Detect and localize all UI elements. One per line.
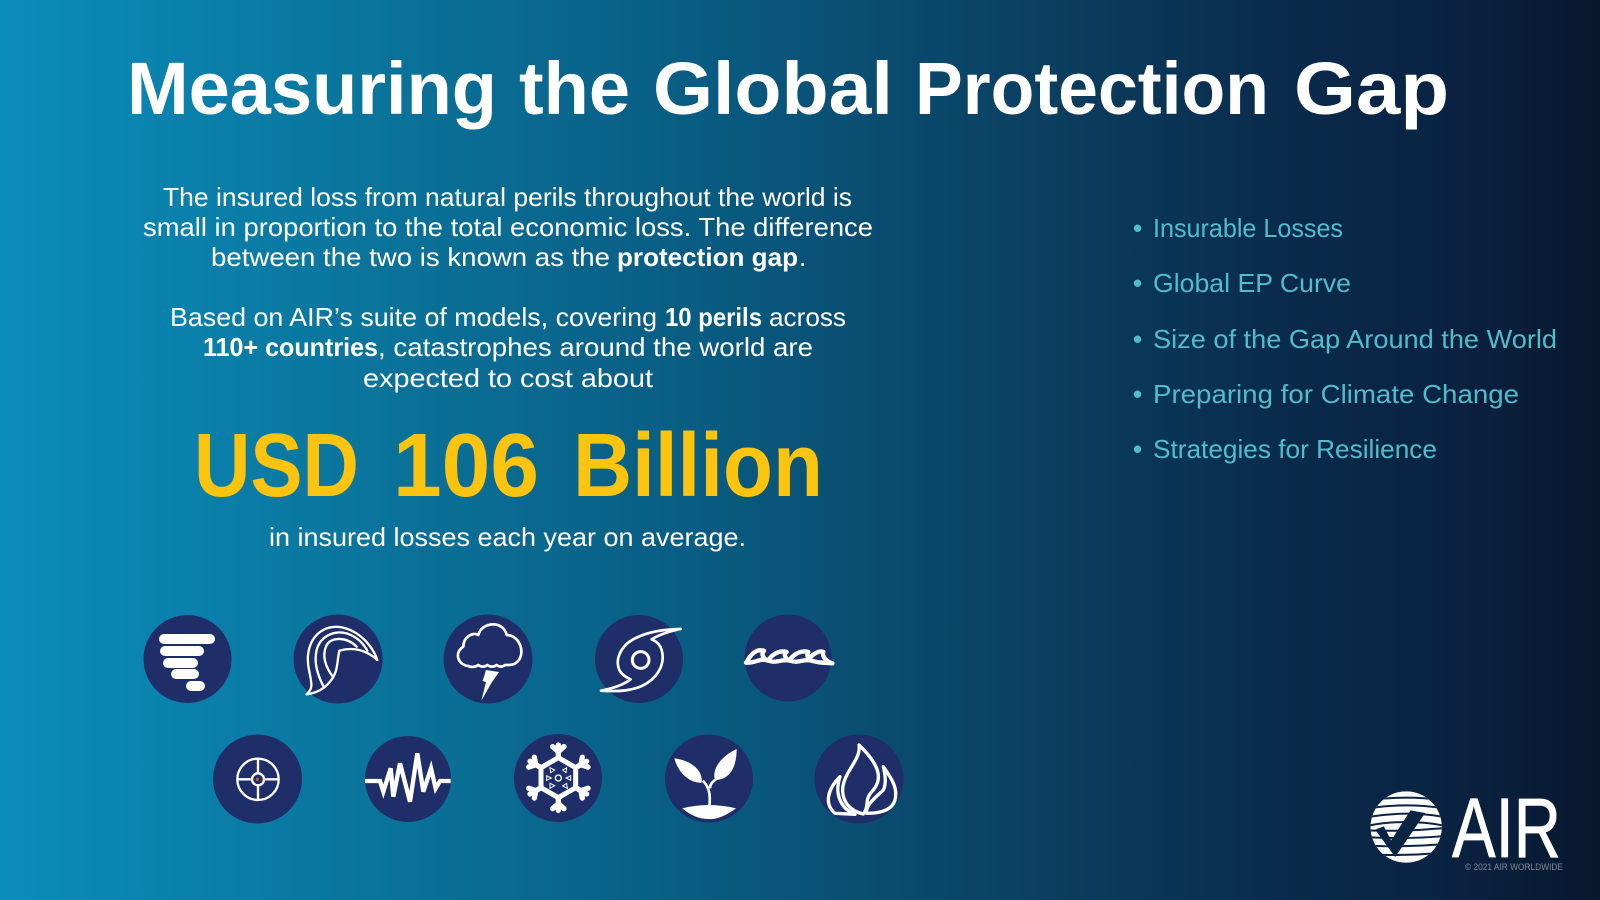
icon: storm surge wave (294, 614, 382, 704)
agenda bullet list (1133, 213, 1557, 464)
models paragraph: 10 perils (665, 302, 762, 332)
intro paragraph: The insured loss from natural perils throughout the world is (163, 182, 852, 212)
icon: wildfire target (213, 734, 302, 824)
agenda bullet list: Strategies for Resilience (1153, 434, 1437, 464)
title: Measuring (127, 47, 497, 130)
logo wordmark: AIR (1452, 781, 1561, 875)
title: Gap (1294, 47, 1449, 130)
icon: agriculture seedling (665, 734, 753, 822)
figure caption: in insured losses each year on average. (269, 522, 746, 552)
agenda bullet list: Preparing for Climate Change (1153, 379, 1519, 409)
agenda bullet list: • (1133, 379, 1142, 409)
icon: flood waves (744, 614, 832, 702)
agenda bullet list: Size of the Gap Around the World (1153, 324, 1557, 354)
agenda bullet list: Global EP Curve (1153, 268, 1351, 298)
agenda bullet list: • (1133, 324, 1142, 354)
intro paragraph: small in proportion to the total economic loss. The difference (143, 212, 873, 242)
intro paragraph (143, 182, 873, 272)
intro paragraph: . (799, 242, 806, 272)
agenda bullet list: • (1133, 213, 1142, 243)
icon: thunderstorm cloud (444, 614, 532, 704)
headline figure: 106 (393, 416, 539, 516)
logo: AIR (1370, 791, 1563, 870)
models paragraph: 110+ countries (203, 332, 378, 362)
models paragraph: across (769, 302, 846, 332)
intro paragraph: protection gap (617, 242, 798, 272)
icon: earthquake seismograph (365, 736, 451, 822)
models paragraph: Based on AIR’s suite of models, covering (170, 302, 657, 332)
headline figure: USD (194, 416, 359, 516)
models paragraph (170, 302, 846, 393)
title: Protection (915, 47, 1269, 130)
agenda bullet list: • (1133, 268, 1142, 298)
title (127, 47, 1449, 130)
icon: winter storm snowflake (514, 734, 602, 822)
title: Global (653, 47, 893, 130)
icon: hurricane (595, 615, 683, 703)
models paragraph: , catastrophes around the world are (378, 332, 813, 362)
title: the (519, 47, 630, 130)
models paragraph: expected to cost about (363, 363, 654, 393)
agenda bullet list: Insurable Losses (1153, 213, 1343, 243)
intro paragraph: between the two is known as the (211, 242, 610, 272)
headline figure (194, 416, 823, 516)
agenda bullet list: • (1133, 434, 1142, 464)
copyright: © 2021 AIR WORLDWIDE (1465, 862, 1563, 872)
headline figure: Billion (573, 416, 823, 516)
icon: wildfire flame (814, 734, 904, 824)
logo globe mark (1370, 791, 1442, 863)
icon: tornado (144, 615, 232, 703)
